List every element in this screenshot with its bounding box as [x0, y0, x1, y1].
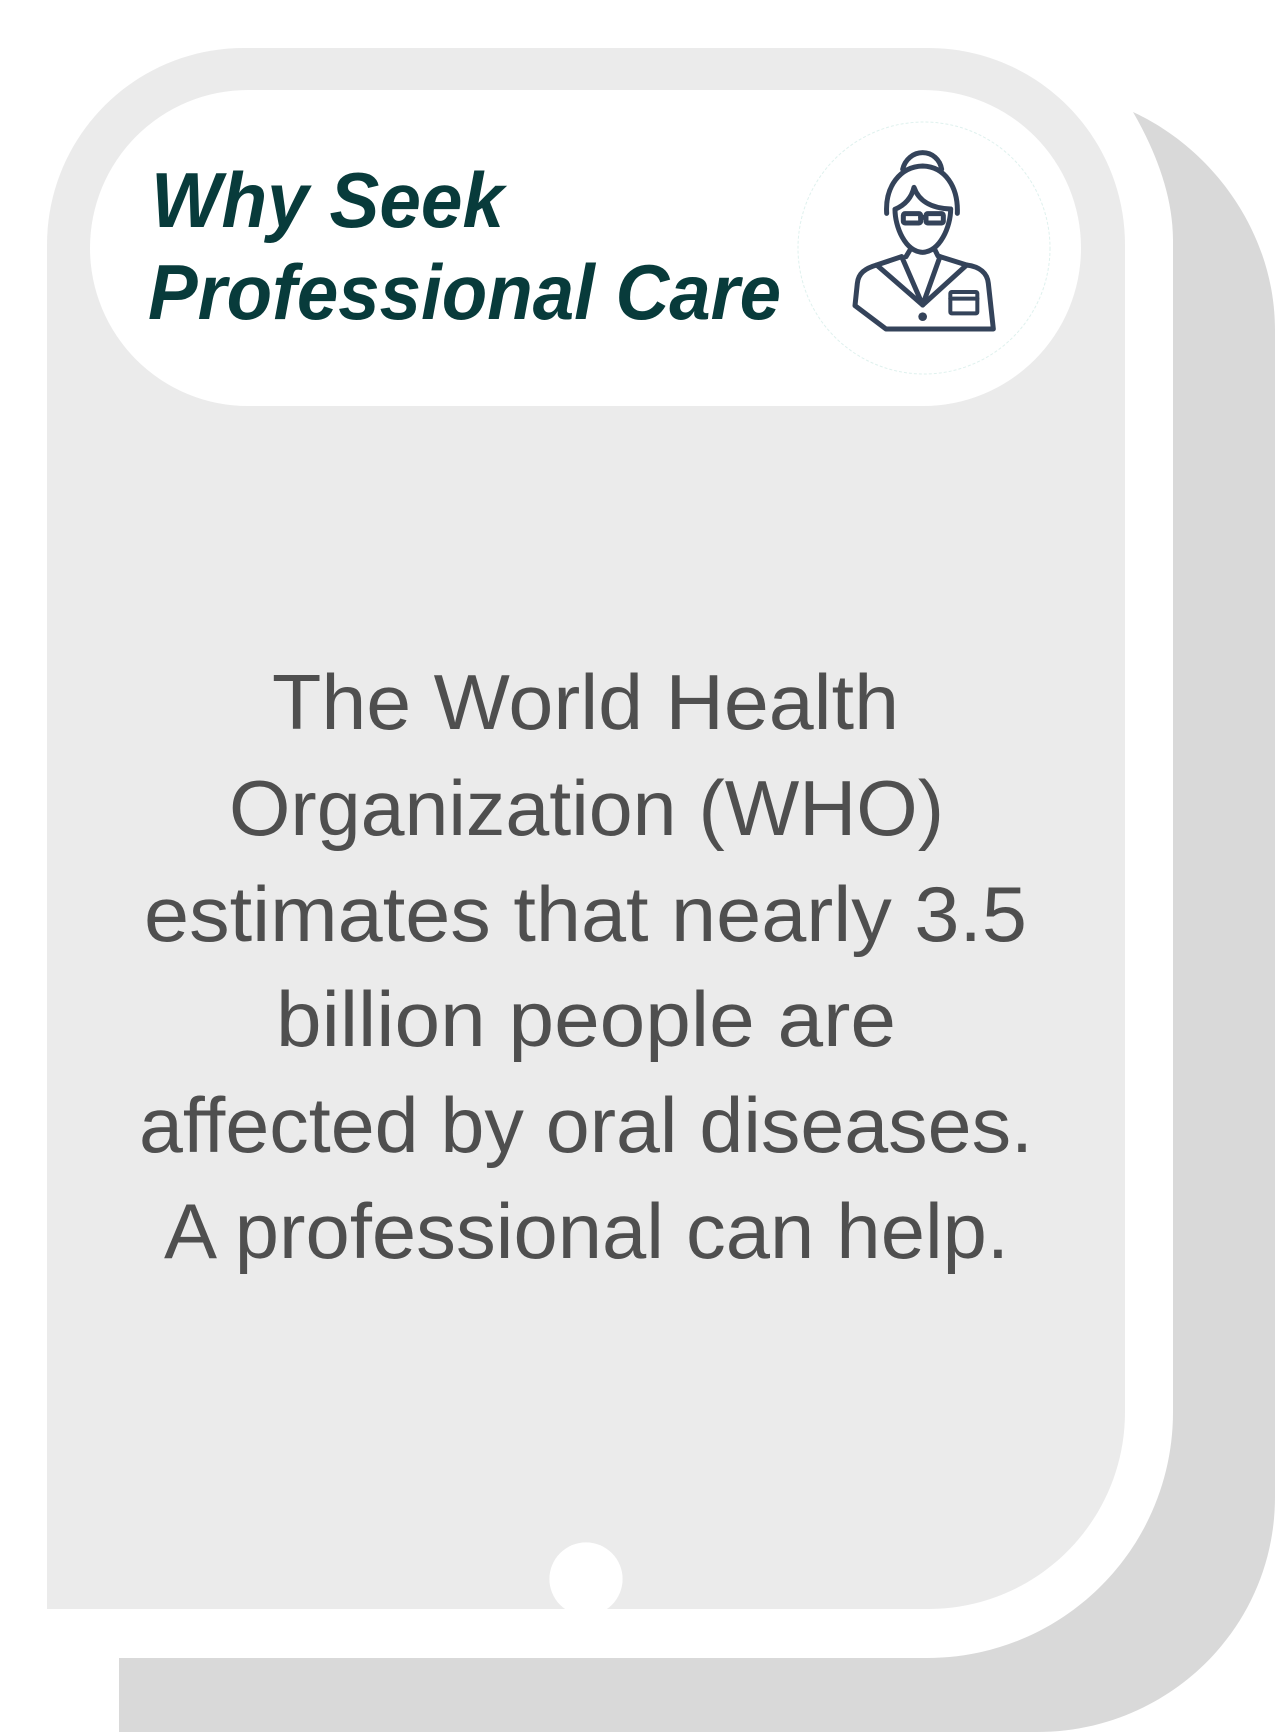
body text: estimates that nearly 3.5 [144, 870, 1027, 958]
body text: Organization (WHO) [229, 764, 944, 852]
card notch [549, 1542, 623, 1616]
body text: billion people are [276, 975, 896, 1063]
heading: Professional Care [148, 248, 781, 336]
heading [148, 156, 781, 336]
body text: affected by oral diseases. [139, 1081, 1033, 1169]
icon circle outline [798, 122, 1050, 374]
body text [139, 658, 1033, 1275]
panel: main card [47, 48, 1125, 1609]
panel: header pill [90, 90, 1081, 406]
icon: doctor with glasses [855, 153, 993, 329]
body text: The World Health [272, 658, 899, 746]
heading: Why Seek [151, 156, 507, 244]
body text: A professional can help. [164, 1187, 1009, 1275]
